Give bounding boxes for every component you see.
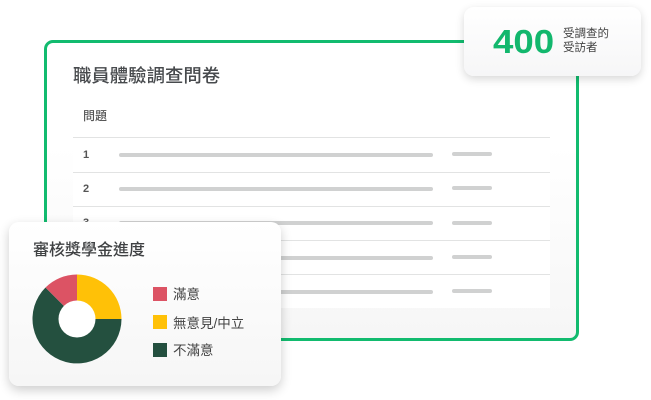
legend: satisfied swatch: [153, 287, 167, 301]
legend: dissatisfied swatch: [153, 343, 167, 357]
panel: survey frame: [44, 40, 579, 341]
legend: dissatisfied label: 不滿意: [173, 343, 214, 358]
row 1 number: 1: [83, 149, 89, 161]
row 3 number: 3: [83, 217, 89, 229]
table background: [73, 100, 550, 308]
label: respondents surveyed: 受調查的: [563, 28, 609, 40]
label: respondents surveyed: [563, 27, 609, 54]
heading: review progress: 審核獎學金進度: [33, 242, 145, 259]
legend: satisfied label: 滿意: [173, 287, 200, 302]
legend: neutral label: 無意見/中立: [173, 316, 244, 331]
heading: survey title: 職員體驗調查問卷: [73, 65, 220, 86]
legend: neutral swatch: [153, 315, 167, 329]
chart: donut: [32, 274, 122, 364]
panel: scholarship review progress: [9, 222, 281, 386]
row 2 number: 2: [83, 183, 89, 195]
column header: questions: 問題: [83, 109, 107, 123]
callout: respondent count: [464, 7, 641, 76]
label: respondents surveyed: 受訪者: [563, 42, 598, 54]
number: 400: 400: [493, 23, 554, 60]
